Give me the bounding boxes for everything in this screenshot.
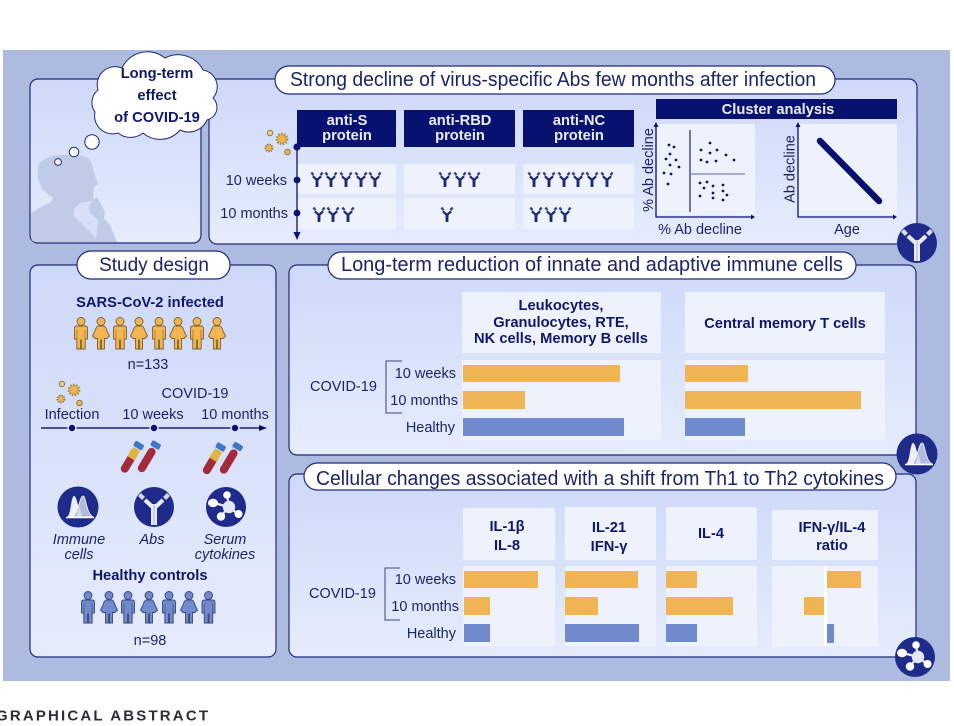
serum cytokines measure: cytokines — [195, 547, 255, 563]
thought bubbles — [55, 135, 99, 165]
row labels: 10 weeks — [395, 572, 456, 588]
study timeline — [41, 407, 269, 432]
immune cells measure: Immune — [53, 532, 105, 548]
cluster analysis heading — [656, 99, 897, 119]
antibodies measure — [134, 487, 174, 548]
column headers: protein — [435, 128, 485, 144]
bar chart: IFN-γ/IL-4 ratio: ratio — [816, 538, 848, 554]
bar chart: central memory T cells: Central memory T cells — [704, 316, 866, 332]
icon: cytokine badge — [895, 637, 935, 677]
bar chart: IL-4 — [666, 507, 757, 646]
column headers: protein — [554, 128, 604, 144]
heading: study design — [77, 251, 230, 279]
heading: study design: Study design — [99, 255, 209, 276]
age correlation chart — [782, 122, 897, 238]
infected people icons — [74, 318, 226, 349]
row labels: Healthy — [406, 420, 456, 436]
cluster analysis heading: Cluster analysis — [722, 102, 834, 118]
antibodies measure: Abs — [138, 532, 164, 548]
healthy people icons — [82, 592, 215, 623]
blood tubes at 10 weeks — [118, 440, 162, 475]
row labels: 10 months — [390, 393, 458, 409]
serum cytokines measure: Serum — [204, 532, 246, 548]
antibody rows — [297, 164, 634, 229]
study timeline: 10 months — [201, 407, 269, 423]
panel: cytokines — [289, 463, 935, 677]
bar chart: IL-21 and IFN-γ — [565, 507, 656, 646]
bar chart: leukocytes and others: Leukocytes, — [519, 298, 603, 314]
bar chart: IL-21 and IFN-γ: IFN-γ — [591, 539, 628, 555]
serum cytokines measure — [195, 487, 255, 563]
column headers — [297, 110, 634, 147]
footer label: GRAPHICAL ABSTRACT — [0, 708, 208, 724]
blood tubes at 10 months — [200, 441, 244, 476]
row labels — [309, 568, 459, 642]
infected group label: SARS-CoV-2 infected — [76, 295, 224, 311]
COVID-19 label: COVID-19 — [162, 386, 228, 402]
column headers: protein — [322, 128, 372, 144]
bar chart: IL-1β and IL-8: IL-8 — [494, 538, 520, 554]
bar chart: IL-1β and IL-8: IL-1β — [489, 519, 525, 535]
bar chart: IL-1β and IL-8 — [463, 508, 555, 646]
immune cells measure — [53, 486, 105, 563]
row labels: 10 weeks — [395, 366, 456, 382]
bar chart: IFN-γ/IL-4 ratio — [772, 510, 878, 646]
icon: antibody badge — [897, 223, 937, 263]
bar chart: IL-4: IL-4 — [698, 526, 725, 542]
scatter plot: % Ab decline — [641, 128, 657, 212]
bar chart: leukocytes and others: Granulocytes, RTE, — [493, 315, 629, 331]
bar chart: leukocytes and others: NK cells, Memory B cells — [474, 331, 648, 347]
age correlation chart: Ab decline — [782, 135, 798, 203]
row labels: Healthy — [407, 626, 457, 642]
age correlation chart: Age — [834, 222, 860, 238]
healthy group label: Healthy controls — [92, 568, 208, 584]
timeline labels: 10 weeks — [226, 173, 287, 189]
vertical timeline arrow — [293, 143, 301, 240]
scatter plot: % Ab decline — [658, 222, 742, 238]
heading: immune cells: Long-term reduction of innate and adaptive immune cells — [341, 254, 843, 276]
heading: antibody decline: Strong decline of virus-specific Abs few months after infection — [290, 69, 816, 91]
column headers: anti-S — [327, 113, 368, 129]
row labels: COVID-19 — [310, 379, 377, 395]
icon: immune cells badge — [896, 434, 938, 474]
bar chart: IFN-γ/IL-4 ratio: IFN-γ/IL-4 — [799, 520, 866, 536]
bar chart: central memory T cells — [685, 292, 885, 440]
column headers: anti-NC — [553, 113, 606, 129]
silhouette of thinking person — [31, 155, 117, 242]
infected count: n=133 — [128, 357, 168, 373]
panel: thinking person — [30, 52, 217, 243]
heading: cytokines: Cellular changes associated with a shift from Th1 to Th2 cytokines — [316, 468, 884, 490]
study timeline: Infection — [45, 407, 99, 423]
timeline labels: 10 months — [220, 206, 288, 222]
healthy count: n=98 — [134, 633, 166, 649]
row labels: COVID-19 — [309, 586, 376, 602]
bar chart: IL-21 and IFN-γ: IL-21 — [592, 520, 626, 536]
thought cloud with text — [92, 52, 217, 139]
thought cloud with text: effect — [137, 88, 177, 104]
bar chart: leukocytes and others — [462, 292, 661, 440]
column headers: anti-RBD — [429, 113, 491, 129]
study timeline: 10 weeks — [122, 407, 184, 423]
icon: virus — [58, 381, 82, 406]
panel: study design — [30, 251, 276, 657]
panel: immune cells — [289, 252, 938, 474]
row labels — [310, 361, 458, 436]
icon: virus — [266, 130, 290, 155]
scatter plot — [641, 122, 755, 238]
panel: antibody decline — [209, 66, 937, 263]
thought cloud with text: of COVID-19 — [114, 110, 200, 126]
timeline labels — [220, 173, 288, 222]
thought cloud with text: Long-term — [121, 66, 193, 82]
immune cells measure: cells — [64, 547, 94, 563]
row labels: 10 months — [391, 599, 459, 615]
